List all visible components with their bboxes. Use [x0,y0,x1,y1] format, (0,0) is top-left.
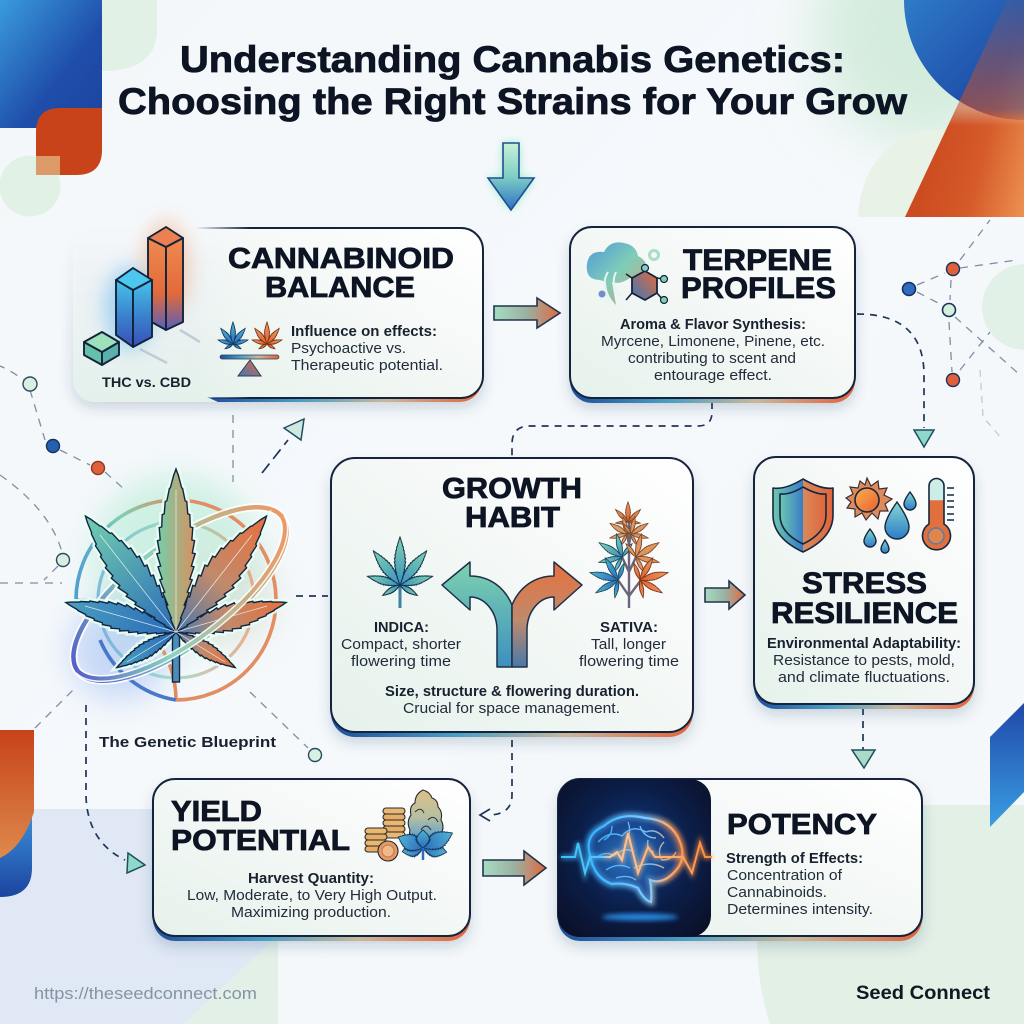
text block [601,317,825,384]
connector: growth to yield [480,740,512,821]
heading [681,244,836,305]
title: Choosing the Right Strains for Your Grow [118,81,907,122]
arrow: top down [488,143,534,210]
icon: branching arrows [442,562,582,667]
text block: Resistance to pests, mold, [773,653,955,669]
heading [228,243,454,304]
heading: GROWTH [442,473,582,505]
connector: blueprint to node [250,692,322,762]
decorative corner shapes: top right [815,0,1024,217]
connector: blueprint to cannabinoid [233,415,304,482]
text block: Harvest Quantity: [248,871,374,887]
text block: Low, Moderate, to Very High Output. [187,888,437,904]
title: Understanding Cannabis Genetics: [180,39,845,80]
panel: cannabinoid balance [73,220,483,402]
text block: Concentration of [727,868,843,884]
image panel: brain [558,779,712,937]
icon: shield [773,479,833,552]
footer url: https://theseedconnect.com [34,984,257,1003]
text: indica: INDICA: [374,620,429,636]
text block: entourage effect. [654,368,772,384]
text: indica: flowering time [351,654,451,670]
network nodes: right [902,220,1020,440]
text block: Maximizing production. [231,905,391,921]
heading: STRESS [802,567,927,600]
heading: BALANCE [265,272,415,304]
text block: and climate fluctuations. [778,670,950,686]
heading [442,473,582,534]
decorative corner shapes: top left [0,0,157,216]
connector: stress to potency [852,708,875,768]
panel: terpene profiles [570,227,855,403]
heading: POTENCY [727,809,877,841]
heading: POTENTIAL [171,825,350,857]
text block: Aroma & Flavor Synthesis: [620,317,806,333]
panel: potency [558,779,922,941]
icon: indica leaf [366,537,434,608]
heading: TERPENE [683,244,832,277]
text block [726,851,873,918]
icon: balance scale [218,322,282,376]
text block: Myrcene, Limonene, Pinene, etc. [601,334,825,350]
text block: Psychoactive vs. [291,341,406,357]
text: sativa: SATIVA: [600,620,658,636]
heading: YIELD [171,796,262,828]
panel: growth habit [331,458,693,737]
panel: yield potential [153,779,470,941]
text block: Size, structure & flowering duration. [385,684,639,700]
text block: Influence on effects: [291,324,437,340]
connector: blueprint to yield [86,705,145,873]
connector: terpene to growth [512,402,712,458]
footer brand: Seed Connect [856,983,991,1004]
text block [767,636,961,686]
text block: Strength of Effects: [726,851,863,867]
icon: coins, bud and leaf [365,790,456,861]
text block: Environmental Adaptability: [767,636,961,652]
text block [385,684,639,717]
text block: Cannabinoids. [727,885,827,901]
text: indica: Compact, shorter [341,637,461,653]
text: sativa [579,620,679,670]
heading: HABIT [465,502,560,534]
heading [771,567,958,630]
panel: stress resilience [754,457,974,709]
icon: thc vs cbd bars [84,220,200,365]
text block [187,871,437,921]
connector: terpene to stress [857,314,934,447]
text block: Crucial for space management. [403,701,620,717]
text block [291,324,443,374]
heading [171,796,350,857]
arrow: growth to stress [705,581,745,609]
text: sativa: flowering time [579,654,679,670]
title [118,39,907,122]
icon: cloud and molecule [587,242,668,305]
label: the genetic blueprint: The Genetic Blueprint [99,734,276,751]
decorative corner shapes: left and bottom [0,264,1024,1024]
text: indica [341,620,461,670]
heading: RESILIENCE [771,597,958,630]
icon: thermometer [922,479,954,550]
text block: Therapeutic potential. [291,358,443,374]
icon: genetic blueprint leaf [48,469,312,711]
text: sativa: Tall, longer [591,637,666,653]
icon: sun [846,478,892,520]
heading: CANNABINOID [228,243,454,275]
connector: blueprint to growth [296,595,328,597]
arrow: yield to potency [483,851,546,885]
text block: Determines intensity. [727,902,873,918]
icon: sativa plant [585,502,673,608]
text block: contributing to scent and [628,351,796,367]
network nodes: left [0,366,125,728]
arrow: cannabinoid to terpene [494,298,560,328]
heading: PROFILES [681,272,836,305]
label: thc vs cbd: THC vs. CBD [102,374,191,390]
icon: water drops [864,492,916,553]
